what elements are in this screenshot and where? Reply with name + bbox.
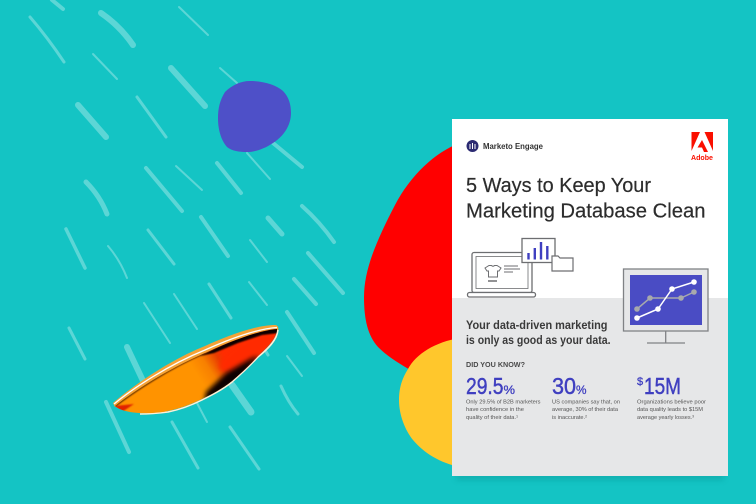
leaf lower cream edge — [140, 330, 278, 414]
stat: $15M — [637, 373, 706, 421]
stat: 30%: US companies say that, on — [552, 400, 620, 406]
stat: 29.5%: have confidence in the — [466, 407, 524, 413]
stat: 29.5%: Only 29.5% of B2B marketers — [466, 400, 541, 406]
stat: 30%: 30 — [552, 373, 576, 399]
icon: laptop with shirt — [468, 252, 536, 297]
leaf white highlight — [114, 328, 277, 404]
stat: $15M: 15M — [644, 373, 681, 399]
stat: 29.5%: 29.5 — [466, 373, 504, 399]
leaf dark upper band — [200, 327, 280, 356]
stat: 30%: is inaccurate.² — [552, 415, 587, 421]
stat: $15M: average yearly losses.³ — [637, 415, 694, 421]
blue blob — [218, 81, 291, 152]
stat: 30%: average, 30% of their data — [552, 407, 619, 413]
leaf red highlight — [218, 334, 276, 372]
Adobe logo — [691, 132, 713, 162]
Marketo Engage logo: Marketo Engage — [483, 141, 543, 151]
title: 5 Ways to Keep Your — [466, 174, 651, 197]
leaf dark lower band — [204, 356, 259, 404]
did you know label: DID YOU KNOW? — [466, 362, 525, 369]
leaf red left tip — [114, 404, 134, 412]
Marketo Engage logo — [466, 140, 543, 152]
leaf body — [115, 329, 277, 413]
stat: 30%: % — [576, 383, 587, 397]
stat: 29.5%: % — [504, 383, 515, 397]
subheading — [466, 318, 610, 347]
leaf thin dark edge at left — [114, 353, 205, 407]
orange glossy leaf shape — [113, 325, 280, 414]
subheading: is only as good as your data. — [466, 333, 610, 347]
leaf orange rim — [113, 325, 278, 407]
title — [466, 174, 706, 222]
card gray bottom — [452, 298, 728, 476]
subheading: Your data-driven marketing — [466, 318, 608, 332]
document card — [452, 119, 728, 476]
icon: monitor with line chart — [624, 269, 708, 343]
icon: bar chart card — [522, 238, 555, 262]
title: Marketing Database Clean — [466, 200, 706, 222]
card white top — [452, 119, 728, 298]
stat: 29.5%: quality of their data.¹ — [466, 415, 518, 421]
icon: folder — [552, 256, 573, 271]
stat: 29.5% — [466, 373, 541, 421]
stat: 30% — [552, 373, 620, 421]
card shadow — [456, 473, 724, 480]
red blob behind card — [364, 143, 460, 371]
background rain streaks — [30, 0, 343, 469]
stat: $15M: Organizations believe poor — [637, 400, 706, 406]
stat: $15M: data quality leads to $15M — [637, 407, 703, 413]
Adobe logo: Adobe — [691, 153, 713, 162]
yellow blob behind card — [399, 338, 460, 467]
stat: $15M: $ — [637, 376, 643, 388]
